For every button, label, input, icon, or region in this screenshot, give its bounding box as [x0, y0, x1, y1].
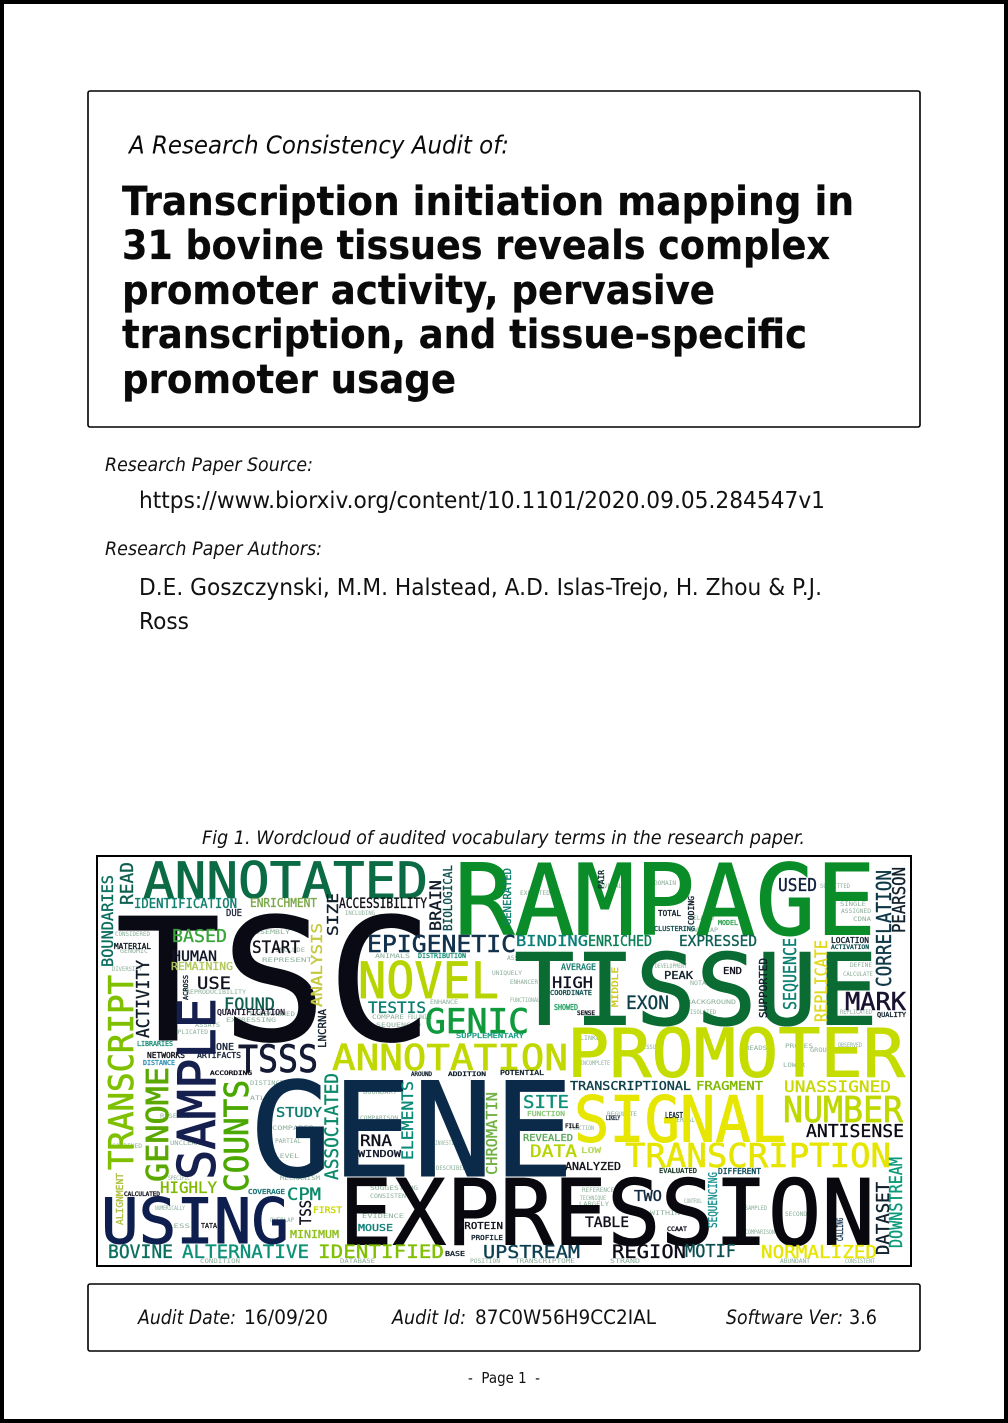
- medium horizontal words: TWO: [634, 1187, 662, 1205]
- vertical words: DATASET: [873, 1182, 894, 1255]
- tiny filler words: UNCLEAR: [170, 1140, 200, 1147]
- medium horizontal words: CALCULATED: [124, 1191, 160, 1198]
- medium horizontal words: DATA: [530, 1142, 577, 1162]
- word: PROMOTER: PROMOTER: [567, 1014, 906, 1092]
- tiny filler words: PROBES: [785, 1043, 813, 1050]
- medium horizontal words: LOCATION: [831, 936, 869, 945]
- medium horizontal words: FILE: [565, 1123, 579, 1130]
- medium horizontal words: CLUSTERING: [654, 925, 695, 933]
- tiny filler words: PARTIAL: [275, 1138, 301, 1145]
- vertical words: ELEMENTS: [398, 1081, 417, 1160]
- tiny filler words: TECHNIQUE: [580, 1195, 606, 1202]
- medium horizontal words: LIBRARIES: [137, 1040, 173, 1048]
- tiny filler words: COMPARED: [272, 1125, 315, 1132]
- vertical words: SUPPORTED: [757, 958, 770, 1018]
- word: ANNOTATION: ANNOTATION: [332, 1038, 568, 1079]
- vertical words: TRANSCRIPT: [102, 975, 142, 1170]
- word: RAMPAGE: RAMPAGE: [454, 844, 876, 958]
- tiny filler words: ASSEMBLY: [250, 929, 291, 936]
- medium horizontal words: USE: [197, 974, 231, 994]
- vertical words: BOUNDARIES: [98, 875, 117, 967]
- medium horizontal words: IDENTIFICATION: [134, 897, 237, 912]
- tiny filler words: FUNCTIONAL: [510, 997, 540, 1004]
- vertical words: TSS: [296, 1200, 315, 1225]
- heading: [122, 179, 854, 403]
- medium horizontal words: RNA: [360, 1131, 392, 1150]
- medium horizontal words: BASE: [445, 1250, 465, 1258]
- tiny filler words: NOTABLE: [690, 980, 718, 987]
- tiny filler words: WITHIN: [650, 1210, 681, 1217]
- tiny filler words: SUGGESTING: [370, 1185, 419, 1192]
- software version: Software Ver:: [726, 1306, 843, 1329]
- authors label: Research Paper Authors:: [105, 538, 322, 560]
- medium horizontal words: ANALYZED: [565, 1160, 621, 1173]
- tiny filler words: REPRODUCIBILITY: [186, 989, 246, 996]
- medium horizontal words: MOUSE: [358, 1223, 393, 1234]
- medium horizontal words: SUPPLEMENTARY: [456, 1032, 525, 1040]
- tiny filler words: SAMPLED: [745, 1205, 767, 1212]
- tiny filler words: CONSISTENT: [845, 1258, 875, 1265]
- tiny filler words: EXPRESSING: [226, 1017, 277, 1024]
- tiny filler words: FOLLOWING: [408, 1014, 432, 1021]
- medium horizontal words: REVEALED: [523, 1133, 573, 1144]
- tiny filler words: LARGELY: [579, 1201, 609, 1208]
- medium horizontal words: SENSE: [577, 1010, 595, 1017]
- medium horizontal words: EVALUATED: [659, 1167, 697, 1175]
- tiny filler words: OBSERVED: [838, 1042, 862, 1049]
- medium horizontal words: WINDOW: [358, 1149, 402, 1160]
- tiny filler words: ABUNDANT: [780, 1258, 810, 1265]
- medium horizontal words: TATA: [201, 1222, 218, 1230]
- tiny filler words: CONSISTENT: [370, 1193, 410, 1200]
- software version: 3.6: [849, 1306, 877, 1329]
- tiny filler words: ENHANCE: [430, 999, 458, 1006]
- tiny filler words: ESPECIALLY: [526, 910, 556, 917]
- tiny filler words: ISOLATED: [690, 1009, 716, 1016]
- medium horizontal words: HIGHLY: [160, 1178, 217, 1197]
- medium horizontal words: DISTANCE: [143, 1059, 175, 1067]
- medium horizontal words: SHOWED: [554, 1003, 578, 1012]
- word: ANNOTATED: ANNOTATED: [143, 852, 428, 910]
- vertical words: GENERATED: [501, 868, 514, 925]
- medium horizontal words: PROTEIN: [458, 1221, 503, 1232]
- word: TSSS: TSSS: [238, 1038, 318, 1081]
- source and authors block: [105, 454, 825, 635]
- medium horizontal words: START: [252, 938, 300, 958]
- medium horizontal words: END: [723, 966, 742, 977]
- tiny filler words: RESEARCH: [160, 1113, 194, 1120]
- medium horizontal words: IDENTIFIED: [318, 1241, 444, 1263]
- audit subtitle: A Research Consistency Audit of:: [127, 130, 509, 160]
- tiny filler words: COMBINED: [112, 1143, 142, 1150]
- tiny filler words: LOWER: [783, 1062, 805, 1069]
- medium horizontal words: LEAST: [665, 1111, 683, 1120]
- medium horizontal words: BOVINE: [108, 1241, 173, 1263]
- tiny filler words: BACKGROUND: [686, 999, 737, 1006]
- tiny filler words: OVERALL: [600, 883, 626, 890]
- audit date: 16/09/20: [244, 1306, 328, 1329]
- tiny filler words: INCLUDE: [275, 947, 305, 954]
- tiny filler words: EVIDENCE: [362, 1213, 405, 1220]
- audit id: [390, 1306, 656, 1329]
- medium horizontal words: MINIMUM: [290, 1228, 339, 1241]
- tiny filler words: FUNCTION: [570, 1125, 594, 1132]
- tiny filler words: CDNA: [853, 916, 871, 923]
- authors: [139, 575, 822, 635]
- medium horizontal words: REMAINING: [171, 960, 233, 973]
- tiny filler words: RESEARCHED: [250, 1011, 295, 1018]
- medium horizontal words: UPSTREAM: [483, 1242, 580, 1263]
- medium horizontal words: ACCESSIBILITY: [339, 896, 427, 912]
- heading: Transcription initiation mapping in: [122, 179, 854, 225]
- tiny filler words: GROUPS: [810, 1047, 835, 1054]
- tiny filler words: EXPECTED: [520, 890, 550, 897]
- medium horizontal words: FUNCTION: [527, 1110, 565, 1118]
- audit date: Audit Date:: [136, 1306, 236, 1329]
- medium horizontal words: FOUND: [224, 995, 275, 1015]
- medium horizontal words: ACTIVATION: [831, 944, 869, 951]
- word: EPIGENETIC: EPIGENETIC: [367, 932, 516, 958]
- tiny filler words: INVESTIGATE: [435, 1140, 465, 1147]
- vertical words: ANALYSIS: [308, 923, 326, 1007]
- medium horizontal words: COORDINATE: [550, 989, 592, 997]
- vertical words: SEQUENCING: [706, 1172, 720, 1228]
- medium horizontal words: DUE: [226, 908, 242, 919]
- tiny filler words: ASSAYS: [195, 1022, 220, 1029]
- medium horizontal words: UNASSIGNED: [784, 1077, 891, 1096]
- tiny filler words: READS: [745, 1045, 767, 1052]
- medium horizontal words: SITE: [523, 1092, 569, 1113]
- vertical words: COUNTS: [217, 1080, 256, 1192]
- medium horizontal words: ACCORDING: [210, 1070, 252, 1077]
- tiny filler words: STRAND: [610, 1258, 641, 1265]
- tiny filler words: DESCRIBED: [436, 1165, 466, 1172]
- word: NUMBER: NUMBER: [783, 1090, 903, 1131]
- tiny filler words: NUMERICALLY: [155, 1205, 185, 1212]
- tiny filler words: LEVEL: [275, 1153, 300, 1160]
- medium horizontal words: CPM: [287, 1185, 321, 1205]
- tiny filler words: IMPLICATED: [170, 1029, 208, 1036]
- word: GENE: GENE: [251, 1054, 574, 1207]
- tiny filler words: COMPARISON: [745, 1229, 775, 1236]
- vertical words: ACTIVITY: [133, 960, 154, 1038]
- authors: D.E. Goszczynski, M.M. Halstead, A.D. Islas-Trejo, H. Zhou & P.J.: [139, 575, 822, 601]
- vertical words: SEQUENCE: [780, 938, 801, 1010]
- vertical words: PAIR: [597, 870, 606, 889]
- vertical words: ASSOCIATED: [321, 1073, 343, 1180]
- vertical words: ACROSS: [182, 975, 190, 1000]
- medium horizontal words: MATERIAL: [114, 942, 151, 951]
- medium horizontal words: EXPRESSED: [679, 932, 757, 950]
- medium horizontal words: TOTAL: [658, 909, 681, 918]
- tiny filler words: DEFINE: [850, 962, 872, 969]
- heading: promoter usage: [122, 357, 456, 403]
- medium horizontal words: REGION: [612, 1241, 686, 1263]
- tiny filler words: LINKED: [580, 1035, 604, 1042]
- tiny filler words: OVERLAP: [270, 1217, 294, 1224]
- tiny filler words: ASSEMBLE: [507, 955, 537, 962]
- medium horizontal words: DIFFERENT: [718, 1167, 761, 1176]
- word: USING: USING: [101, 1185, 289, 1258]
- vertical words: ALIGNMENT: [115, 1173, 126, 1225]
- audit date: [136, 1306, 328, 1329]
- tiny filler words: INCLUDING: [345, 910, 375, 917]
- vertical words: DOWNSTREAM: [886, 1157, 907, 1248]
- medium horizontal words: QUANTIFICATION: [217, 1008, 285, 1017]
- medium horizontal words: QUALITY: [877, 1011, 907, 1019]
- tiny filler words: DIVERSITY: [112, 966, 142, 973]
- tiny filler words: DOMAIN: [654, 880, 676, 887]
- vertical words: [98, 862, 910, 1255]
- tiny filler words: [112, 880, 875, 1265]
- tiny filler words: REGULATE: [607, 1111, 637, 1118]
- source label: Research Paper Source:: [105, 454, 313, 476]
- vertical words: MIDDLE: [611, 967, 621, 1007]
- vertical words: CALLING: [836, 1218, 846, 1241]
- medium horizontal words: AVERAGE: [561, 963, 596, 973]
- word cloud: [97, 844, 911, 1266]
- word: MARK: MARK: [845, 987, 906, 1016]
- audit id: Audit Id:: [390, 1306, 466, 1329]
- tiny filler words: SPECIFIC: [168, 1175, 190, 1182]
- word: TSC: TSC: [115, 883, 433, 1081]
- tiny filler words: INTERNAL: [665, 1117, 695, 1124]
- tiny filler words: INCOMPLETE: [580, 1060, 610, 1067]
- tiny filler words: SUBMITTED: [820, 883, 850, 890]
- tiny filler words: UNIQUELY: [492, 970, 522, 977]
- medium horizontal words: COVERAGE: [248, 1188, 285, 1196]
- medium horizontal words: HUMAN: [172, 949, 217, 965]
- tiny filler words: ENHANCER: [510, 979, 538, 986]
- medium horizontal words: TABLE: [585, 1215, 629, 1231]
- word: NOVEL: NOVEL: [358, 952, 499, 1010]
- vertical words: READ: [117, 862, 138, 905]
- medium horizontal words: MODEL: [718, 919, 738, 927]
- tiny filler words: CONDITION: [200, 1258, 240, 1265]
- authors: Ross: [139, 609, 189, 635]
- medium horizontal words: ALTERNATIVE: [182, 1241, 309, 1263]
- tiny filler words: CONSIDERED: [115, 931, 150, 938]
- tiny filler words: ATLAS: [250, 1095, 276, 1102]
- vertical words: GENOME: [141, 1067, 176, 1182]
- page number: - Page 1 -: [468, 1369, 540, 1387]
- panel: title: [88, 91, 920, 427]
- medium horizontal words: ADDITION: [448, 1071, 486, 1078]
- medium horizontal words: POTENTIAL: [500, 1069, 544, 1077]
- tiny filler words: ASSIGNED: [841, 908, 871, 915]
- panel: audit footer: [88, 1284, 920, 1351]
- medium horizontal words: LOW: [581, 1146, 601, 1155]
- heading: transcription, and tissue-specific: [122, 312, 807, 358]
- medium horizontal words: FRAGMENT: [696, 1079, 763, 1093]
- tiny filler words: OVERLAP: [690, 927, 718, 934]
- tiny filler words: RELATED: [690, 915, 714, 922]
- tiny filler words: ANIMALS: [375, 953, 411, 960]
- tiny filler words: MECHANISM: [280, 1175, 320, 1182]
- tiny filler words: TISSUES: [640, 1044, 662, 1051]
- word: EXPRESSION: EXPRESSION: [339, 1162, 875, 1266]
- medium horizontal words: EXON: [626, 992, 669, 1014]
- medium horizontal words: ENRICHMENT: [250, 896, 317, 910]
- tiny filler words: TRANSCRIPTOME: [515, 1258, 575, 1265]
- medium horizontal words: ONE: [216, 1042, 234, 1053]
- medium horizontal words: ANTISENSE: [806, 1121, 904, 1142]
- vertical words: CORRELATION: [872, 870, 896, 987]
- tiny filler words: SINGLE: [840, 901, 866, 908]
- vertical words: PEARSON: [889, 867, 910, 933]
- vertical words: SAMPLE: [168, 998, 228, 1180]
- vertical words: BRAIN: [426, 880, 445, 931]
- vertical words: BIOLOGICAL: [441, 865, 455, 931]
- tiny filler words: CALCULATE: [843, 971, 873, 978]
- medium horizontal words: [108, 875, 907, 1263]
- medium horizontal words: DISTRIBUTION: [418, 952, 466, 960]
- tiny filler words: COMPARISON: [360, 1115, 398, 1122]
- audit id: 87C0W56H9CC2IAL: [475, 1306, 656, 1329]
- tiny filler words: SECOND: [785, 1211, 807, 1218]
- vertical words: CODING: [687, 896, 696, 925]
- medium horizontal words: USED: [778, 875, 817, 896]
- tiny filler words: DEVELOPMENT: [655, 963, 687, 970]
- medium horizontal words: FIRST: [313, 1206, 343, 1216]
- medium horizontal words: BASED: [172, 926, 227, 947]
- medium horizontal words: TESTIS: [368, 998, 426, 1017]
- tiny filler words: BOUNDARY: [363, 1089, 397, 1096]
- medium horizontal words: PROFILE: [471, 1234, 503, 1242]
- tiny filler words: COMPARE: [372, 1014, 404, 1021]
- tiny filler words: SEQUENCED: [376, 1022, 422, 1029]
- vertical words: REPLICATE: [812, 940, 832, 1022]
- medium horizontal words: LIKELY: [606, 1115, 620, 1122]
- medium horizontal words: CCAAT: [667, 1226, 687, 1233]
- heading: 31 bovine tissues reveals complex: [122, 223, 830, 269]
- source url: https://www.biorxiv.org/content/10.1101/2020.09.05.284547v1: [139, 488, 825, 514]
- tiny filler words: DISTINCT: [250, 1080, 284, 1087]
- tiny filler words: REPRESENT: [262, 957, 313, 964]
- vertical words: CHROMATIN: [483, 1092, 501, 1175]
- tiny filler words: REFERENCE: [582, 1187, 614, 1194]
- word: TRANSCRIPTION: TRANSCRIPTION: [625, 1136, 891, 1175]
- medium horizontal words: TRANSCRIPTIONAL: [570, 1079, 691, 1093]
- word: TISSUE: TISSUE: [514, 934, 878, 1048]
- medium horizontal words: PEAK: [664, 969, 693, 982]
- medium horizontal words: BINDING: [516, 932, 588, 950]
- tiny filler words: HEATMAP: [398, 1033, 418, 1040]
- word: SIGNAL: SIGNAL: [574, 1084, 786, 1156]
- vertical words: LNCRNA: [316, 1009, 329, 1048]
- medium horizontal words: ARTIFACTS: [197, 1051, 241, 1060]
- tiny filler words: LESS: [168, 1223, 191, 1230]
- tiny filler words: CONTROL: [684, 1198, 702, 1205]
- medium horizontal words: STUDY: [276, 1106, 322, 1121]
- tiny filler words: REPLICATED: [840, 1009, 872, 1016]
- vertical words: SIZE: [324, 893, 342, 936]
- figure caption: Fig 1. Wordcloud of audited vocabulary terms in the research paper.: [202, 827, 805, 849]
- medium horizontal words: HIGH: [552, 973, 593, 992]
- tiny filler words: GENOMIC: [120, 948, 148, 955]
- tiny filler words: DATABASE: [340, 1258, 375, 1265]
- medium horizontal words: NETWORKS: [147, 1051, 185, 1060]
- medium horizontal words: ENRICHED: [588, 932, 652, 950]
- medium horizontal words: MOTIF: [685, 1241, 736, 1262]
- medium horizontal words: NORMALIZED: [761, 1242, 877, 1263]
- word: GENIC: GENIC: [425, 1002, 529, 1042]
- heading: promoter activity, pervasive: [122, 268, 715, 314]
- medium horizontal words: AROUND: [411, 1071, 432, 1078]
- tiny filler words: POSITION: [470, 1258, 500, 1265]
